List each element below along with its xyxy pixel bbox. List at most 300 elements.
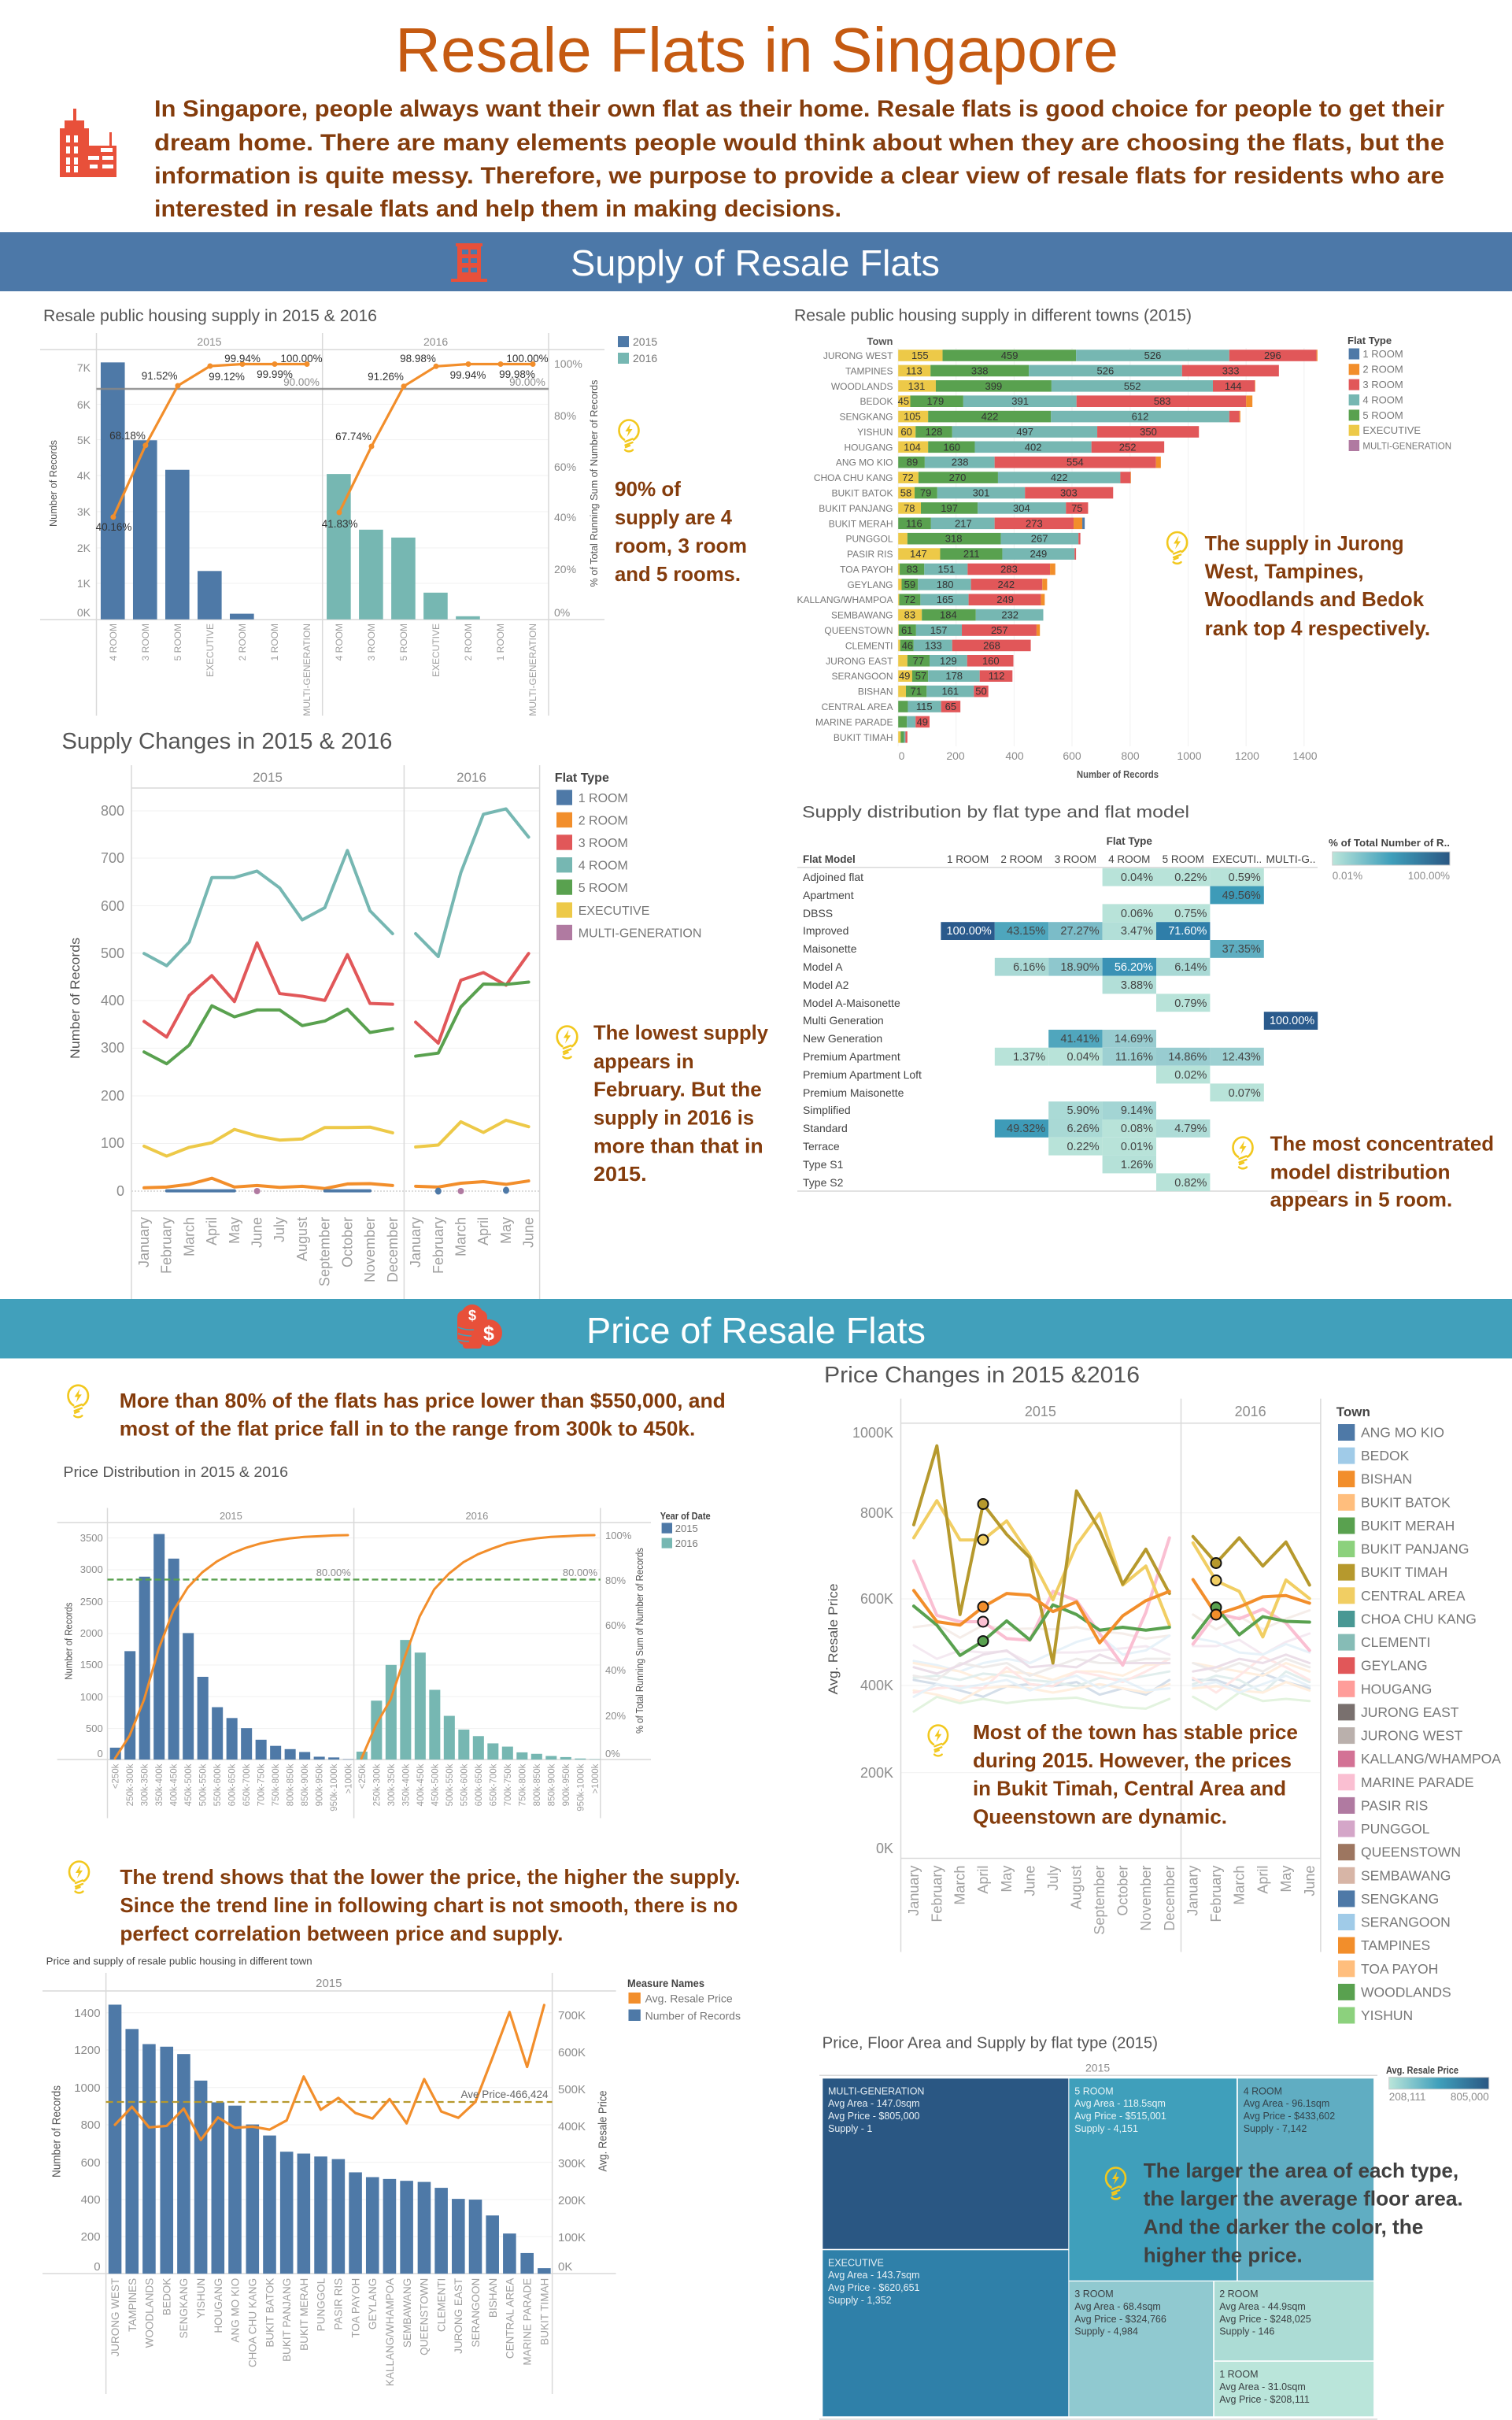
bar value labels: 113 (906, 364, 922, 376)
town legend: CLEMENTI (1361, 1634, 1430, 1650)
data labels: 99.94% (450, 369, 486, 381)
legend (555, 772, 701, 940)
y axis (852, 1425, 893, 1856)
bar value labels: 296 (1264, 350, 1281, 361)
panel: supply changes line chart (61, 729, 701, 1299)
panel: price and supply combo chart (43, 1956, 741, 2394)
town legend (1336, 1404, 1501, 2023)
bar value labels: 197 (941, 502, 958, 514)
callout: treemap reading: And the darker the color, the (1144, 2215, 1423, 2238)
bar value labels: 333 (1222, 364, 1239, 376)
left axis: 3500 (80, 1532, 103, 1544)
y axis: 600K (860, 1591, 893, 1607)
town names: BUKIT PANJANG (819, 503, 893, 514)
town labels: KALLANG/WHAMPOA (384, 2278, 396, 2386)
icon: tower (451, 243, 487, 282)
heatmap values: 6.16% (1013, 961, 1045, 974)
month labels: January (408, 1217, 423, 1267)
town labels: GEYLANG (367, 2278, 379, 2329)
y axis: 0 (116, 1183, 124, 1199)
town labels: PUNGGOL (316, 2278, 327, 2331)
town names: JURONG EAST (826, 656, 893, 667)
left axis: 2K (77, 542, 91, 554)
heatmap values: 37.35% (1222, 943, 1261, 956)
legend: 4 ROOM (579, 860, 628, 873)
bar value labels: 270 (949, 472, 966, 483)
legend: 2015 (675, 1523, 698, 1534)
data labels: 91.52% (142, 370, 177, 382)
row labels: Improved (803, 924, 848, 937)
legend: EXECUTIVE (1362, 424, 1421, 436)
y axis: 200 (101, 1088, 124, 1104)
heatmap values: 0.04% (1067, 1051, 1100, 1064)
town labels: PASIR RIS (332, 2278, 345, 2330)
highlighted town lines (914, 1446, 1310, 1665)
town names (797, 350, 893, 743)
month labels: October (1115, 1866, 1130, 1916)
right axis: 40% (554, 511, 576, 524)
axis titles: Avg. Resale Price (596, 2091, 609, 2171)
town labels: JURONG EAST (453, 2278, 464, 2354)
price band labels: 700k-750k (257, 1763, 267, 1806)
bar value labels: 526 (1097, 364, 1114, 376)
panel: supply pareto chart (40, 307, 657, 716)
legend: Year of Date (660, 1510, 711, 1522)
row labels: Terrace (803, 1140, 840, 1153)
heading: Supply distribution by flat type and flat model (802, 804, 1189, 822)
month labels: March (181, 1217, 197, 1256)
data labels: 40.16% (96, 521, 131, 533)
right axis: 200K (558, 2194, 586, 2207)
town legend: CENTRAL AREA (1361, 1588, 1466, 1604)
data labels: 99.99% (257, 368, 293, 380)
category labels: 4 ROOM (108, 624, 119, 661)
row labels: Type S2 (803, 1176, 844, 1189)
price band labels: 450k-500k (184, 1763, 194, 1806)
tile: 2 room: Avg Price - $248,025 (1219, 2314, 1311, 2325)
heatmap values: 43.15% (1007, 925, 1045, 938)
callout: price under 550k: More than 80% of the flats has price lower than $550,000, and (120, 1389, 726, 1412)
bar value labels: 104 (904, 441, 921, 453)
heading: Price Distribution in 2015 & 2016 (63, 1464, 288, 1480)
callout: 90 percent (615, 477, 747, 586)
month labels: December (385, 1217, 401, 1282)
callout: price stability: Most of the town has stable price (973, 1720, 1298, 1744)
faint town lines (914, 1611, 1310, 1711)
axis titles: % of Total Running Sum of Number of Records (588, 379, 600, 587)
tile: 4 room: Avg Price - $433,602 (1244, 2111, 1335, 2122)
column headers (803, 835, 1316, 865)
month labels: May (498, 1217, 514, 1244)
price band labels: 800k-850k (287, 1763, 296, 1806)
heatmap values: 11.16% (1115, 1051, 1153, 1064)
town labels: MARINE PARADE (521, 2278, 533, 2366)
bar value labels: 83 (907, 564, 918, 575)
panel: supply section banner (0, 232, 1512, 291)
right axis: 40% (605, 1664, 626, 1676)
right axis: 60% (554, 461, 576, 473)
tile: multi-generation: MULTI-GENERATION (828, 2086, 924, 2097)
callout: treemap reading (1144, 2159, 1463, 2266)
y axis (101, 803, 124, 1199)
heatmap values: 0.22% (1067, 1141, 1100, 1153)
town legend: SERANGOON (1361, 1915, 1451, 1930)
bar value labels: 422 (1051, 472, 1068, 483)
heatmap values: 1.37% (1013, 1051, 1045, 1064)
price band labels: 650k-700k (242, 1763, 252, 1806)
legend: Flat Type (1347, 335, 1392, 346)
intro text block (154, 96, 1444, 222)
town legend: SENGKANG (1361, 1891, 1439, 1907)
category labels: EXECUTIVE (205, 624, 216, 677)
month labels: February (431, 1217, 446, 1274)
gridlines (107, 1538, 601, 1729)
town labels: BISHAN (487, 2278, 499, 2318)
town legend: BUKIT TIMAH (1361, 1564, 1447, 1580)
bar value labels: 57 (915, 670, 926, 682)
town labels: BUKIT BATOK (264, 2278, 275, 2348)
month labels: August (294, 1217, 310, 1261)
legend: Flat Type (555, 772, 609, 785)
x axis: 200 (946, 749, 965, 762)
town names: BUKIT TIMAH (834, 732, 893, 743)
bar value labels: 338 (971, 364, 989, 376)
price band labels: 300k-350k (387, 1763, 397, 1806)
right axis: 400K (558, 2120, 586, 2133)
month labels: July (272, 1217, 287, 1242)
tile: 3 room: Supply - 4,984 (1074, 2326, 1138, 2337)
bar value labels: 50 (975, 686, 987, 698)
town legend: SEMBAWANG (1361, 1867, 1451, 1883)
category labels: MULTI-GENERATION (301, 624, 312, 716)
tile: 4 room: 4 ROOM (1244, 2086, 1282, 2097)
bar value labels: 144 (1225, 380, 1242, 392)
price band labels: 900k-950k (562, 1763, 571, 1806)
heatmap values: 100.00% (1270, 1015, 1314, 1027)
callout: concentrated model (1270, 1132, 1494, 1212)
bar value labels: 242 (997, 579, 1015, 590)
year headers: 2016 (465, 1510, 488, 1522)
category labels: 3 ROOM (366, 624, 377, 661)
bar value labels: 49 (917, 716, 928, 727)
heatmap values: 0.06% (1121, 908, 1153, 920)
icon: bulb (1167, 532, 1187, 564)
data labels: 100.00% (506, 353, 549, 364)
y axis: 300 (101, 1040, 124, 1056)
panel: treemap of price, area and supply (819, 2035, 1489, 2419)
town names: PASIR RIS (847, 549, 893, 560)
town names: BUKIT MERAH (829, 518, 893, 529)
bar value labels: 303 (1060, 487, 1078, 499)
right axis (554, 357, 582, 619)
bar value labels: 71 (911, 686, 922, 698)
town names: GEYLANG (847, 579, 893, 590)
month labels: April (204, 1217, 220, 1245)
town names: CLEMENTI (845, 640, 893, 651)
column headers: MULTI-G.. (1266, 853, 1316, 865)
gridlines (131, 811, 539, 1143)
bar value labels: 105 (904, 411, 921, 423)
town names: BUKIT BATOK (831, 488, 893, 499)
right axis: 100% (605, 1530, 632, 1541)
left axis: 1K (77, 577, 91, 590)
town legend: YISHUN (1361, 2007, 1413, 2023)
reference labels (316, 1567, 597, 1578)
x axis: 1400 (1292, 749, 1318, 762)
callout: price under 550k (120, 1389, 726, 1441)
legend (660, 1510, 711, 1549)
small markers (254, 1187, 509, 1195)
heatmap values: 0.04% (1121, 871, 1153, 884)
colour legend: 208,111 (1389, 2091, 1425, 2103)
bar value labels: 554 (1067, 457, 1084, 468)
price band labels: 550k-600k (460, 1763, 469, 1806)
axis titles (47, 379, 600, 587)
colour legend: Avg. Resale Price (1386, 2064, 1458, 2076)
right axis: 0% (554, 606, 570, 619)
tile: 3 room: 3 ROOM (1074, 2289, 1114, 2300)
price band labels: >1000k (345, 1763, 354, 1794)
heatmap values: 5.90% (1067, 1105, 1100, 1117)
town labels: BUKIT PANJANG (281, 2278, 293, 2362)
bar value labels: 238 (952, 457, 968, 468)
right axis: 20% (605, 1710, 626, 1722)
town labels: SEMBAWANG (401, 2278, 413, 2348)
price band labels: 950k-1000k (330, 1763, 339, 1811)
panel: heatmap of flat type and model (797, 804, 1450, 1191)
tile: multi-generation: Avg Price - $805,000 (828, 2111, 920, 2122)
price band labels: <250k (112, 1763, 121, 1789)
legend (618, 335, 657, 364)
bar value labels: 184 (940, 609, 957, 621)
y axis: 200K (860, 1765, 893, 1781)
bar value labels: 257 (991, 624, 1008, 636)
tile: 5 room: 5 ROOM (1074, 2086, 1114, 2097)
bar value labels: 58 (900, 487, 911, 499)
colour legend: 805,000 (1451, 2091, 1489, 2103)
icon: coins: $ (483, 1323, 494, 1345)
left axis: 0 (97, 1748, 103, 1759)
tile: multi-generation: Avg Area - 147.0sqm (828, 2098, 920, 2109)
month labels: February (929, 1866, 945, 1922)
bar value labels: 45 (898, 395, 909, 407)
bar value labels: 161 (941, 686, 959, 698)
bar value labels: 267 (1031, 533, 1048, 545)
town names: QUEENSTOWN (824, 625, 893, 636)
callout: 90 percent: 90% of (615, 477, 681, 501)
data labels: 99.94% (224, 353, 261, 364)
icon: bulb (619, 420, 639, 451)
heatmap values: 14.69% (1115, 1033, 1153, 1045)
category labels: 3 ROOM (140, 624, 151, 661)
town legend: BUKIT BATOK (1361, 1494, 1451, 1510)
month labels: March (952, 1866, 968, 1905)
y axis: 700 (101, 850, 124, 866)
town legend: HOUGANG (1361, 1681, 1432, 1697)
callout: price and supply trend: Since the trend line in following chart is not smooth, there is no (120, 1893, 738, 1917)
month labels: September (1092, 1866, 1107, 1935)
legend: 5 ROOM (1362, 409, 1403, 421)
price band labels: 750k-800k (518, 1763, 527, 1806)
legend: Avg. Resale Price (645, 1992, 733, 2004)
town names: CENTRAL AREA (822, 701, 893, 712)
section heading: supply: Supply of Resale Flats (571, 242, 940, 283)
bar value labels: 72 (904, 594, 915, 605)
average price resale line (115, 2005, 544, 2140)
heatmap cells (941, 868, 1318, 1191)
town names: BEDOK (860, 396, 893, 407)
bar value labels: 65 (945, 701, 956, 712)
town legend: ANG MO KIO (1361, 1425, 1444, 1441)
right axis: 0% (605, 1748, 620, 1759)
row labels: Model A-Maisonette (803, 997, 900, 1009)
price band labels: 700k-750k (504, 1763, 513, 1806)
x axis: 800 (1121, 749, 1140, 762)
right axis: 300K (558, 2157, 586, 2170)
town legend: MARINE PARADE (1361, 1774, 1474, 1790)
selected month markers (978, 1499, 1222, 1646)
right axis: 100% (554, 357, 582, 370)
right axis: 600K (558, 2046, 586, 2059)
left axis: 200 (81, 2230, 101, 2244)
line series (144, 809, 529, 1191)
left axis: 2000 (80, 1627, 103, 1639)
town column heading: Town (867, 335, 893, 347)
town labels: SERANGOON (470, 2278, 482, 2348)
price band labels: 450k-500k (431, 1763, 440, 1806)
colour legend: 0.01% (1333, 870, 1362, 882)
town names: WOODLANDS (831, 381, 893, 392)
row labels: Premium Apartment Loft (803, 1068, 922, 1081)
legend: 2016 (633, 352, 657, 364)
town names: ANG MO KIO (836, 457, 893, 468)
axis titles: % of Total Running Sum of Number of Records (634, 1548, 645, 1734)
town labels: BUKIT TIMAH (538, 2278, 550, 2345)
town names: BISHAN (858, 686, 893, 698)
bar value labels (898, 350, 1281, 727)
year headers (253, 770, 486, 785)
town names: SENGKANG (839, 412, 893, 423)
town names: TOA PAYOH (840, 564, 893, 575)
town labels: YISHUN (195, 2278, 207, 2318)
left axis: 0K (77, 606, 91, 619)
town legend: JURONG WEST (1361, 1728, 1463, 1744)
bar value labels: 217 (955, 517, 972, 529)
bar value labels: 211 (963, 548, 980, 560)
title: Resale Flats in Singapore (395, 15, 1118, 85)
left axis: 2500 (80, 1596, 103, 1608)
category labels: 1 ROOM (495, 624, 506, 661)
callout: lowest supply: appears in (593, 1049, 694, 1073)
colour legend: 100.00% (1408, 870, 1450, 882)
callout: price stability (973, 1720, 1298, 1829)
callout: lowest supply: more than that in (593, 1134, 763, 1158)
bar value labels: 157 (930, 624, 947, 636)
town legend: PUNGGOL (1361, 1821, 1430, 1837)
heatmap values: 4.79% (1174, 1123, 1207, 1135)
town legend: TOA PAYOH (1361, 1961, 1438, 1977)
bar value labels: 46 (902, 639, 913, 651)
bar value labels: 249 (996, 594, 1014, 605)
town legend: QUEENSTOWN (1361, 1845, 1461, 1860)
bar value labels: 83 (904, 609, 915, 621)
town legend: BISHAN (1361, 1471, 1412, 1487)
bar value labels: 160 (943, 441, 960, 453)
category labels: 5 ROOM (172, 624, 183, 661)
bar value labels: 133 (925, 639, 942, 651)
data labels (96, 353, 549, 533)
bar value labels: 399 (985, 380, 1002, 392)
x axis: 600 (1063, 749, 1081, 762)
month labels: March (1231, 1866, 1247, 1905)
heatmap values: 0.75% (1174, 908, 1207, 920)
bar value labels: 459 (1001, 350, 1018, 361)
town legend: BUKIT PANJANG (1361, 1541, 1469, 1557)
price band labels: 250k-300k (126, 1763, 135, 1806)
left axis: 500 (86, 1722, 103, 1734)
panel: price section banner (0, 1299, 1512, 1359)
gridlines (898, 348, 1304, 746)
town names: CHOA CHU KANG (814, 472, 893, 483)
heading: Resale public housing supply in 2015 & 2016 (43, 307, 377, 325)
column headers: 1 ROOM (947, 853, 989, 865)
callout: concentrated model: appears in 5 room. (1270, 1188, 1452, 1212)
left axis (77, 361, 91, 619)
running total curves (115, 1535, 594, 1759)
gridlines (105, 2013, 553, 2237)
town labels: HOUGANG (213, 2278, 224, 2333)
bar value labels: 552 (1124, 380, 1141, 392)
bar value labels: 350 (1140, 426, 1157, 438)
legend: 2016 (675, 1537, 698, 1549)
icon: city buildings (60, 109, 116, 177)
town legend: WOODLANDS (1361, 1984, 1451, 2000)
town names: SERANGOON (831, 671, 893, 682)
average label: Ave Price-466,424 (461, 2088, 549, 2100)
category labels: 2 ROOM (463, 624, 474, 661)
left axis: 400 (81, 2193, 101, 2207)
bar value labels: 77 (913, 655, 924, 667)
heatmap values (947, 871, 1314, 1190)
town legend: TAMPINES (1361, 1937, 1430, 1953)
category labels: 5 ROOM (398, 624, 409, 661)
bar value labels: 178 (945, 670, 963, 682)
bar value labels: 151 (938, 564, 955, 575)
year headers: 2015 (253, 770, 283, 785)
bar value labels: 160 (982, 655, 1000, 667)
heatmap values: 0.08% (1121, 1123, 1153, 1135)
x axis (899, 749, 1318, 762)
right axis (558, 2009, 586, 2274)
callout: price stability: in Bukit Timah, Central Area and (973, 1777, 1286, 1800)
tile: 4 room: Supply - 7,142 (1244, 2123, 1307, 2134)
tile: executive: Avg Area - 143.7sqm (828, 2270, 920, 2281)
bar value labels: 155 (911, 350, 929, 361)
tile: 1 room: Avg Area - 31.0sqm (1219, 2381, 1306, 2392)
gridlines (96, 405, 549, 583)
colour legend: % of Total Number of R.. (1329, 837, 1450, 849)
town labels: JURONG WEST (109, 2278, 121, 2357)
price band labels: 900k-950k (316, 1763, 325, 1806)
price band labels: 500k-550k (445, 1763, 455, 1806)
right axis: 80% (605, 1574, 626, 1586)
bar value labels: 129 (940, 655, 957, 667)
row labels: Type S1 (803, 1158, 844, 1171)
bar value labels: 273 (1026, 517, 1043, 529)
heatmap values: 9.14% (1121, 1105, 1153, 1117)
data labels: 68.18% (109, 430, 146, 442)
x axis: 1200 (1235, 749, 1259, 762)
